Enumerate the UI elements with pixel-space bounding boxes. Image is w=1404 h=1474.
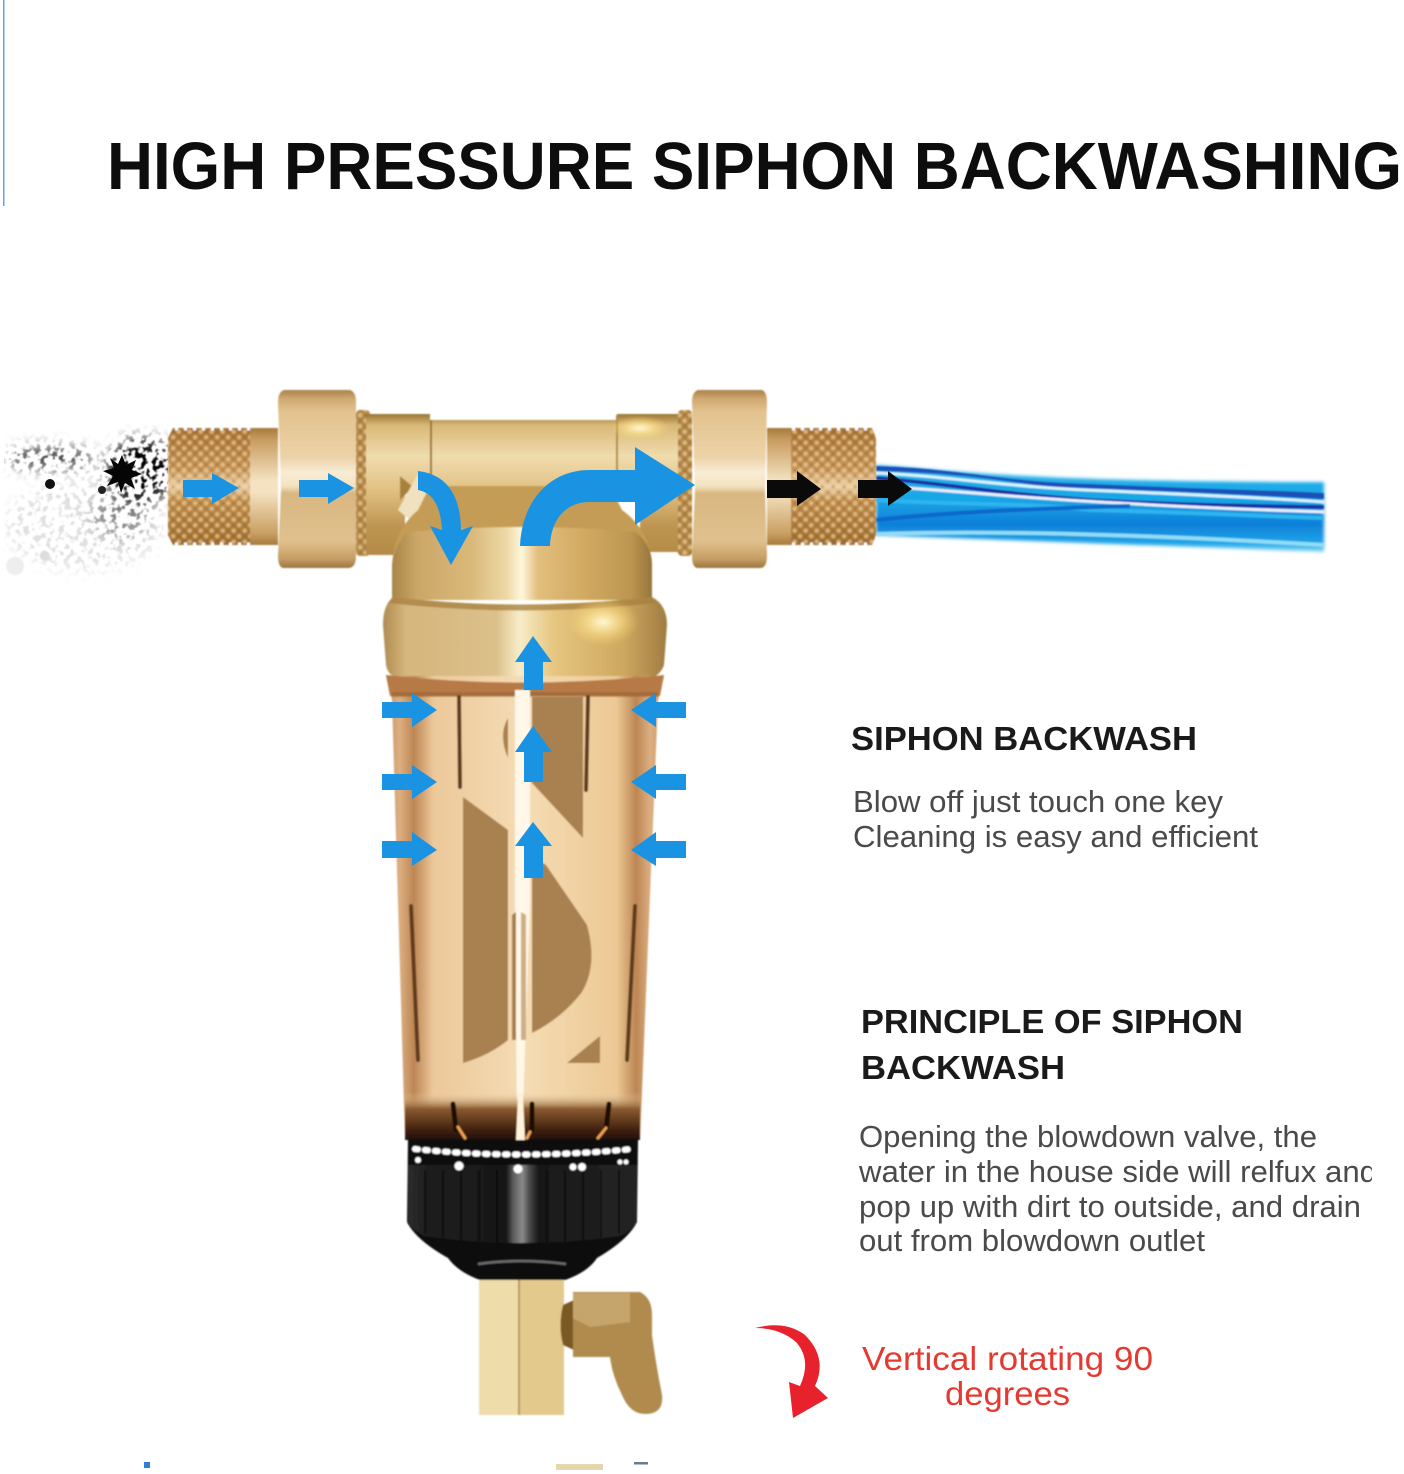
text: principle of siphon backwash [858, 1003, 1377, 1258]
big curved arrow [520, 447, 695, 546]
text: principle of siphon backwash: Opening the blowdown valve, the [859, 1119, 1317, 1154]
text: principle of siphon backwash: pop up with dirt to outside, and drain [859, 1189, 1361, 1224]
dirty water inlet [4, 438, 178, 575]
text: siphon backwash: Blow off just touch one key [853, 784, 1224, 819]
black drain cap [407, 1140, 638, 1280]
red caption: Vertical rotating 90 [862, 1340, 1153, 1377]
center up arrows [515, 636, 552, 690]
curved down arrow [418, 471, 473, 565]
shoulder band [383, 597, 667, 678]
neck [392, 486, 652, 600]
drain valve [479, 1280, 662, 1415]
left threaded inlet [168, 428, 278, 545]
red caption [862, 1340, 1153, 1412]
text: principle of siphon backwash: BACKWASH [861, 1049, 1065, 1086]
text: principle of siphon backwash: water in the house side will relfux and [858, 1154, 1377, 1189]
clean water outlet stream [876, 465, 1324, 552]
text: siphon backwash [851, 720, 1258, 854]
filter arrows, left [382, 693, 437, 727]
text: siphon backwash: SIPHON BACKWASH [851, 720, 1197, 757]
black outlet arrows [767, 471, 912, 506]
cap dot ring [415, 1149, 632, 1154]
right threaded outlet [767, 428, 876, 545]
text: siphon backwash: Cleaning is easy and efficient [853, 819, 1258, 854]
text: principle of siphon backwash: PRINCIPLE OF SIPHON [861, 1003, 1243, 1040]
red rotation arrow [755, 1325, 828, 1418]
center highlight [515, 690, 530, 1140]
valve handle [573, 1292, 662, 1414]
inlet arrow 1 [183, 473, 239, 504]
left union nut [278, 390, 356, 568]
inlet arrow 2 [299, 473, 354, 504]
red caption: degrees [945, 1375, 1070, 1412]
bowl slots [411, 697, 635, 1060]
blue flow arrows [183, 447, 695, 878]
text: principle of siphon backwash: out from blowdown outlet [859, 1223, 1205, 1258]
filter mesh [463, 697, 600, 1063]
right union nut [692, 390, 767, 568]
transparent bowl [386, 675, 664, 1140]
brass filter body [168, 390, 876, 1415]
filter arrows, right [631, 693, 686, 727]
T-pipe [356, 410, 692, 556]
